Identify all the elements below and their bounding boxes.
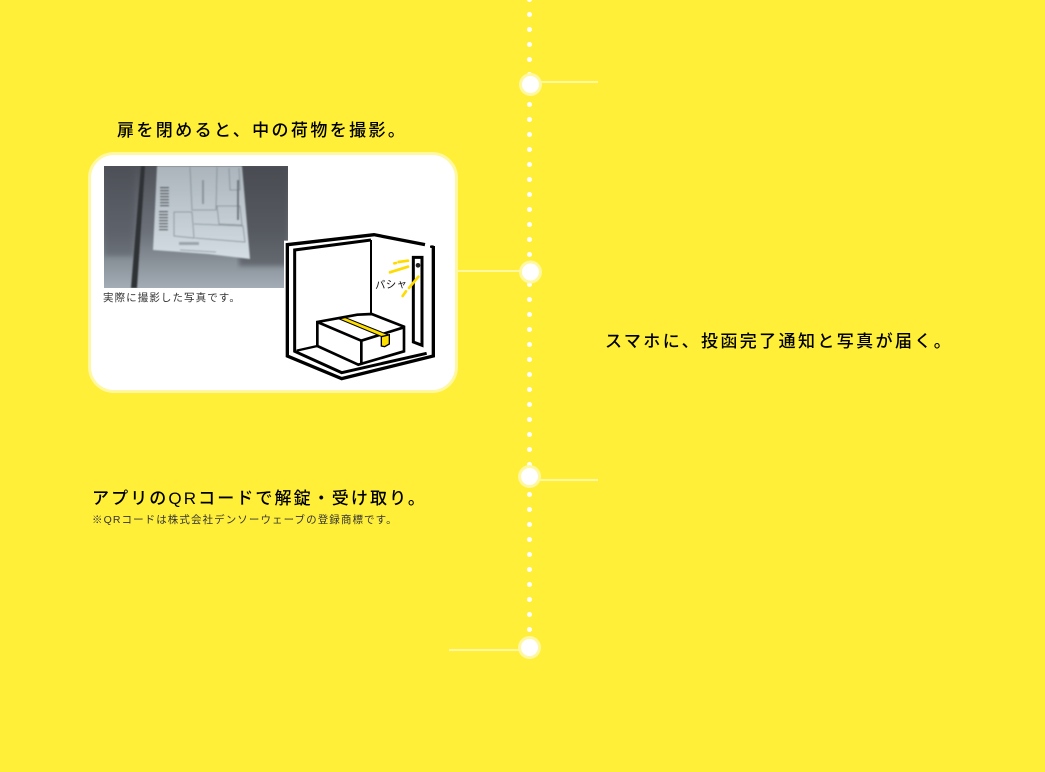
heading: door closes and photo is taken: 扉を閉めると、中の荷物を撮影。 <box>117 121 407 140</box>
icon: locker with parcel and flash <box>284 233 435 380</box>
footnote: QR code trademark: ※QRコードは株式会社デンソーウェーブの登録商標です。 <box>92 514 398 526</box>
heading: phone notification: スマホに、投函完了通知と写真が届く。 <box>605 332 953 351</box>
photo caption: 実際に撮影した写真です。 <box>103 292 241 304</box>
flash sound text: パシャ <box>375 278 408 292</box>
photo: parcel captured inside the box <box>104 166 288 288</box>
heading: unlock with QR code: アプリのQRコードで解錠・受け取り。 <box>92 489 427 508</box>
panel: photo and locker illustration <box>88 152 458 393</box>
